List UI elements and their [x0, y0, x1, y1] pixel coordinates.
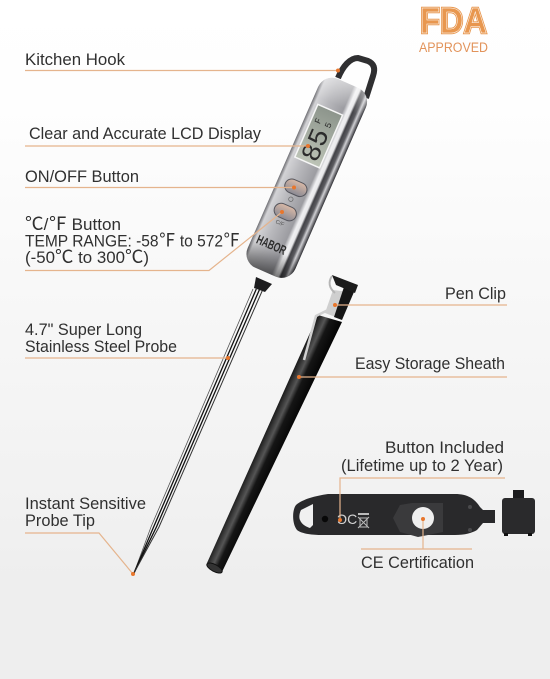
callout: unit button and range — [25, 210, 284, 270]
kitchen hook — [338, 58, 374, 98]
callout: on/off button — [25, 168, 296, 190]
CE mark: ƆC — [337, 511, 357, 527]
callout: kitchen hook — [25, 51, 340, 72]
callout: probe: 4.7" Super Long — [25, 321, 142, 339]
sheath — [205, 275, 358, 575]
thermometer — [134, 58, 374, 573]
thermometer neck — [254, 277, 272, 292]
callout: CE certification — [361, 517, 474, 572]
callout: probe — [25, 321, 230, 360]
FDA logo: FDA — [420, 0, 487, 41]
battery compartment — [393, 503, 443, 537]
probe — [134, 289, 263, 573]
callout: CE certification: CE Certification — [361, 554, 474, 572]
callout: battery: (Lifetime up to 2 Year) — [341, 457, 503, 475]
callout: storage sheath — [297, 355, 507, 379]
callout: battery — [338, 439, 505, 522]
callout: LCD display — [25, 125, 310, 148]
callout: on/off button: ON/OFF Button — [25, 168, 139, 186]
back body — [293, 494, 495, 535]
callout: unit button and range: ℃/℉ Button — [25, 210, 121, 236]
callout: probe tip: Instant Sensitive — [25, 495, 146, 513]
callout: unit button and range: TEMP RANGE: -58℉ to 572℉ — [25, 226, 240, 252]
callout: unit button and range: (-50℃ to 300℃) — [25, 243, 149, 269]
thermometer body — [242, 73, 372, 283]
loop opening — [299, 504, 313, 528]
power icon — [288, 196, 294, 202]
approved text: APPROVED — [419, 40, 488, 55]
callout: pen clip — [333, 285, 507, 307]
callout: kitchen hook: Kitchen Hook — [25, 51, 126, 69]
callout: probe: Stainless Steel Probe — [25, 338, 177, 356]
FDA approved badge — [419, 0, 488, 55]
brand name: HABOR — [254, 232, 289, 258]
callout: storage sheath: Easy Storage Sheath — [355, 355, 505, 373]
callout: battery: Button Included — [385, 439, 504, 457]
screw holes — [468, 505, 472, 532]
battery — [412, 507, 434, 529]
device back view — [293, 494, 495, 537]
pen clip cap — [325, 275, 358, 320]
recycling mark — [358, 514, 369, 528]
callout: probe tip: Probe Tip — [25, 512, 95, 530]
unit label: C/F — [274, 219, 285, 229]
sheath tube — [207, 315, 342, 572]
callout: pen clip: Pen Clip — [445, 285, 506, 303]
unit button — [272, 201, 299, 223]
sheath rounded end — [205, 561, 224, 575]
pen clip — [304, 310, 328, 360]
LCD display: 85 — [297, 125, 338, 167]
LCD display: F — [313, 117, 325, 126]
FDA logo: FDA — [420, 0, 487, 41]
callout: probe tip — [25, 495, 146, 576]
LCD display — [294, 103, 347, 170]
battery cover — [502, 490, 535, 536]
LCD display: 5 — [323, 121, 335, 130]
callout: LCD display: Clear and Accurate LCD Display — [29, 125, 262, 143]
power button — [283, 177, 309, 199]
hanging hole — [322, 516, 328, 522]
